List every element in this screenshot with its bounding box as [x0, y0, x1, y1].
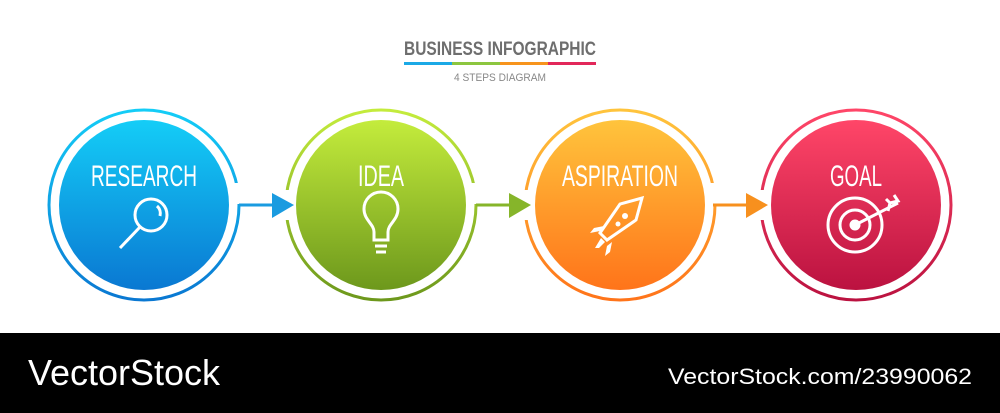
footer bar	[0, 333, 1000, 413]
step 1: research	[49, 110, 246, 300]
step 1: research: RESEARCH	[91, 160, 197, 193]
step 4: goal	[751, 110, 951, 300]
icon: rocket	[590, 198, 642, 256]
step 2: idea: IDEA	[358, 160, 404, 193]
step 4: goal: GOAL	[830, 160, 882, 193]
arrow 1	[239, 193, 294, 218]
arrow 2	[476, 193, 531, 218]
footer bar: VectorStock.com/23990062	[668, 364, 972, 389]
icon: target	[828, 195, 898, 252]
step 2: idea	[276, 110, 483, 300]
icon: bulb	[364, 192, 398, 252]
title	[404, 39, 596, 84]
footer bar: VectorStock	[28, 352, 221, 393]
icon: magnifier	[120, 199, 167, 248]
arrow 3	[713, 193, 768, 218]
title: 4 STEPS DIAGRAM	[454, 72, 546, 84]
title: BUSINESS INFOGRAPHIC	[404, 39, 596, 60]
step 3: aspiration: ASPIRATION	[562, 160, 678, 193]
step 3: aspiration	[515, 110, 722, 300]
